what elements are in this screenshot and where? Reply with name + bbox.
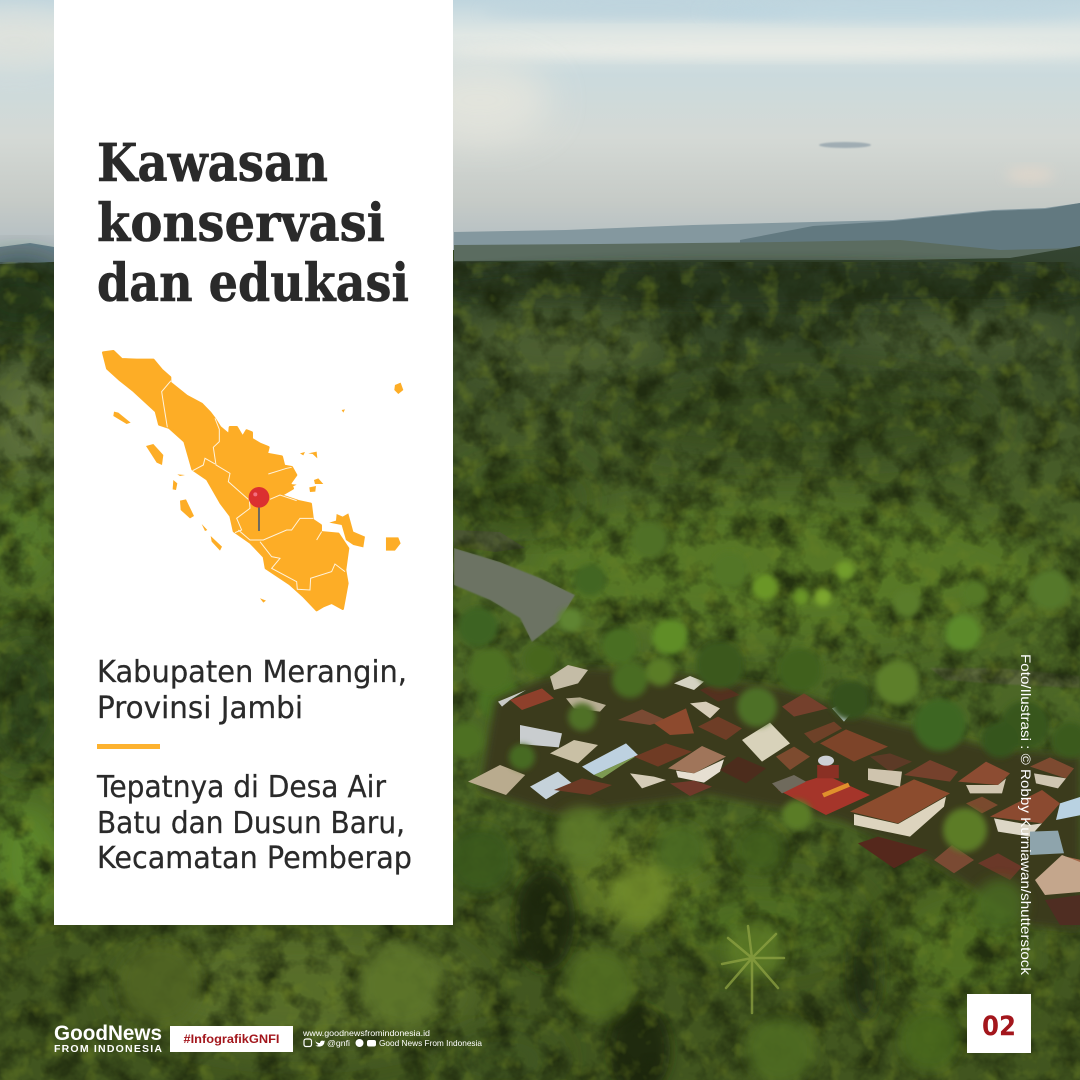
village and district text: Kecamatan Pemberap: [97, 841, 412, 876]
yellow divider: [97, 744, 160, 749]
white text panel: [54, 0, 453, 925]
village roofs: [468, 665, 1080, 880]
contact and social links: @gnfi: [327, 1038, 350, 1048]
sky: [0, 0, 1080, 250]
contact and social links: [302, 1028, 482, 1048]
forest light and shadow masses: [0, 263, 1080, 1080]
logo: GoodNews from Indonesia: FROM INDONESIA: [54, 1043, 162, 1055]
village and district text: Batu dan Dusun Baru,: [97, 806, 405, 841]
mainland Sumatra: [103, 351, 348, 610]
logo: GoodNews from Indonesia: [54, 1022, 162, 1055]
regency and province text: Provinsi Jambi: [97, 691, 303, 726]
location pin: [249, 487, 269, 531]
heading: dan edukasi: [97, 253, 409, 314]
lower village roofs: [1035, 855, 1080, 925]
heading: Kawasan: [97, 133, 328, 194]
photo credit: Foto/Ilustrasi : © Robby Kurniawan/shutterstock: [1018, 654, 1034, 976]
islands: [113, 383, 403, 603]
distant mountains: [0, 203, 1080, 272]
contact and social links: Good News From Indonesia: [379, 1038, 482, 1048]
forest base: [0, 246, 1080, 1080]
icon: youtube: [367, 1040, 376, 1046]
sunlit trees: [458, 522, 1070, 722]
village: [448, 627, 1080, 930]
regency and province text: [97, 655, 407, 726]
page number badge: [967, 994, 1031, 1053]
palm tree: [722, 926, 784, 1013]
province borders: [162, 381, 345, 590]
regency and province text: Kabupaten Merangin,: [97, 655, 407, 690]
icon: instagram: [304, 1039, 312, 1046]
icon: facebook: [356, 1039, 364, 1047]
heading: [97, 133, 409, 314]
logo: GoodNews from Indonesia: GoodNews: [54, 1022, 162, 1045]
contact and social links: www.goodnewsfromindonesia.id: [302, 1028, 430, 1038]
hashtag label: #InfografikGNFI: [184, 1032, 280, 1046]
foreground trees: [120, 807, 1026, 1080]
map of Sumatra with pin: [103, 351, 403, 610]
hashtag label: [170, 1026, 293, 1052]
heading: konservasi: [97, 193, 385, 254]
page number badge: 02: [982, 1011, 1016, 1042]
forest canopy texture: [0, 262, 1080, 1080]
village ground: [480, 668, 1080, 930]
village and district text: Tepatnya di Desa Air: [96, 770, 387, 805]
village and district text: [96, 770, 412, 876]
river: [454, 530, 1080, 688]
village palms and trees: [448, 627, 1080, 852]
icon: twitter: [315, 1040, 325, 1047]
